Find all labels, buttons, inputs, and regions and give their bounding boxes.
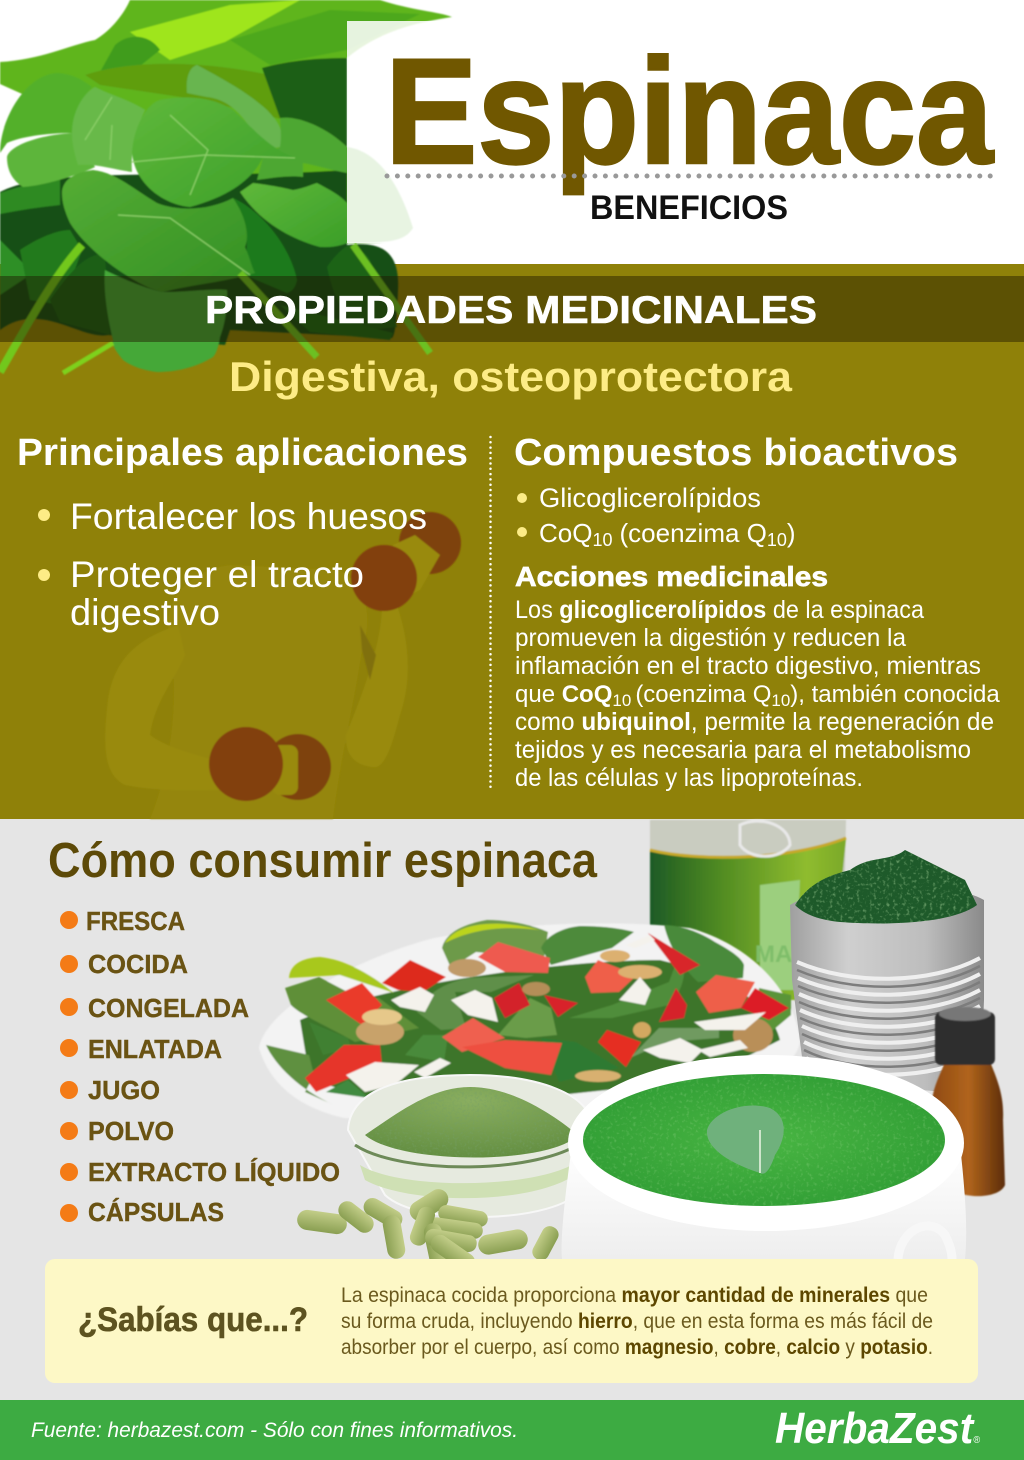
list: forms of consumption: COCIDA bbox=[88, 949, 188, 979]
list: forms of consumption: CONGELADA bbox=[88, 993, 249, 1023]
list: main applications: Fortalecer los huesos bbox=[70, 496, 427, 537]
list: bioactive compounds: 10 bbox=[592, 530, 612, 550]
heading: main applications: Principales aplicaciones bbox=[17, 432, 468, 474]
divider: title dots bbox=[387, 174, 992, 178]
text: medicinal actions: tejidos y es necesaria para el metabolismo bbox=[515, 736, 971, 764]
list: main applications: digestivo bbox=[70, 592, 220, 633]
text: medicinal actions: inflamación en el tracto digestivo, mientras bbox=[515, 652, 981, 680]
list: forms of consumption: CÁPSULAS bbox=[88, 1197, 224, 1227]
list: bioactive compounds: 10 bbox=[767, 530, 787, 550]
text: source: Fuente: herbazest.com - Sólo con fines informativos. bbox=[31, 1419, 518, 1442]
text: medicinal actions: ), también conocida bbox=[790, 681, 1000, 708]
list: main applications: Proteger el tracto bbox=[70, 554, 364, 595]
panel: consumption background bbox=[0, 819, 1024, 1400]
subtitle: BENEFICIOS bbox=[590, 189, 788, 227]
text: did you know bbox=[341, 1284, 933, 1359]
text: medicinal actions: 10 bbox=[771, 691, 790, 710]
text: did you know: su forma cruda, incluyendo hierro, que en esta forma es más fácil de bbox=[341, 1310, 933, 1333]
text: property types: Digestiva, osteoprotectora bbox=[229, 353, 793, 400]
list: main applications bbox=[38, 496, 427, 633]
text: did you know: absorber por el cuerpo, así como magnesio, cobre, calcio y potasio. bbox=[341, 1336, 933, 1359]
text: medicinal actions: de las células y las lipoproteínas. bbox=[515, 764, 863, 792]
heading: bioactive compounds: Compuestos bioactivos bbox=[514, 432, 958, 474]
list: forms of consumption: POLVO bbox=[88, 1116, 174, 1146]
title: Espinaca bbox=[385, 27, 994, 195]
icon: spinach leaves bbox=[0, 0, 452, 373]
text: did you know: La espinaca cocida proporciona mayor cantidad de minerales que bbox=[341, 1284, 928, 1307]
text: medicinal actions: (coenzima Q bbox=[635, 681, 771, 708]
list: bioactive compounds bbox=[517, 483, 796, 550]
text: medicinal actions: promueven la digestión y reducen la bbox=[515, 624, 906, 652]
list: forms of consumption: EXTRACTO LÍQUIDO bbox=[88, 1157, 340, 1187]
icon: spinach salad bbox=[259, 920, 800, 1125]
text: medicinal actions: que CoQ bbox=[515, 681, 612, 708]
list: bioactive compounds: ) bbox=[787, 518, 796, 548]
text: medicinal actions: Los glicoglicerolípidos de la espinaca bbox=[515, 596, 924, 624]
list: forms of consumption: ENLATADA bbox=[88, 1034, 222, 1064]
icon: woman with dumbbells bbox=[105, 512, 461, 819]
list: forms of consumption: JUGO bbox=[88, 1075, 160, 1105]
panel: translucent title backing bbox=[347, 21, 1024, 243]
list: forms of consumption bbox=[60, 906, 340, 1227]
icon: extract bottle bbox=[932, 1007, 1005, 1196]
icon: canned spinach bbox=[790, 845, 985, 1095]
list: bioactive compounds: (coenzima Q bbox=[620, 518, 767, 548]
panel: footer bbox=[0, 1400, 1024, 1460]
icon: capsules bbox=[296, 1185, 561, 1275]
list: bioactive compounds: Glicoglicerolípidos bbox=[539, 483, 761, 513]
heading: medicinal actions: Acciones medicinales bbox=[515, 561, 828, 592]
callout: did you know bbox=[45, 1259, 978, 1383]
heading: medicinal properties: PROPIEDADES MEDICINALES bbox=[205, 289, 817, 332]
panel: dark band bbox=[0, 276, 1024, 342]
panel: header background bbox=[0, 0, 1024, 264]
list: forms of consumption: FRESCA bbox=[86, 906, 185, 936]
logo: HerbaZest: HerbaZest® bbox=[775, 1404, 981, 1453]
icon: powder bowl bbox=[348, 1075, 592, 1217]
divider: column dots bbox=[489, 437, 492, 790]
text: medicinal actions bbox=[515, 596, 1000, 792]
list: bioactive compounds: CoQ bbox=[539, 518, 592, 548]
icon: juice jar bbox=[650, 820, 846, 1000]
text: medicinal actions: 10 bbox=[612, 691, 631, 710]
panel: medicinal properties background bbox=[0, 264, 1024, 819]
heading: how to consume: Cómo consumir espinaca bbox=[48, 834, 598, 888]
heading: did you know: ¿Sabías que...? bbox=[78, 1301, 308, 1339]
text: medicinal actions: como ubiquinol, permite la regeneración de bbox=[515, 708, 994, 736]
icon: soup bowl bbox=[562, 1055, 966, 1259]
icon: juice jar: MA bbox=[755, 941, 792, 968]
